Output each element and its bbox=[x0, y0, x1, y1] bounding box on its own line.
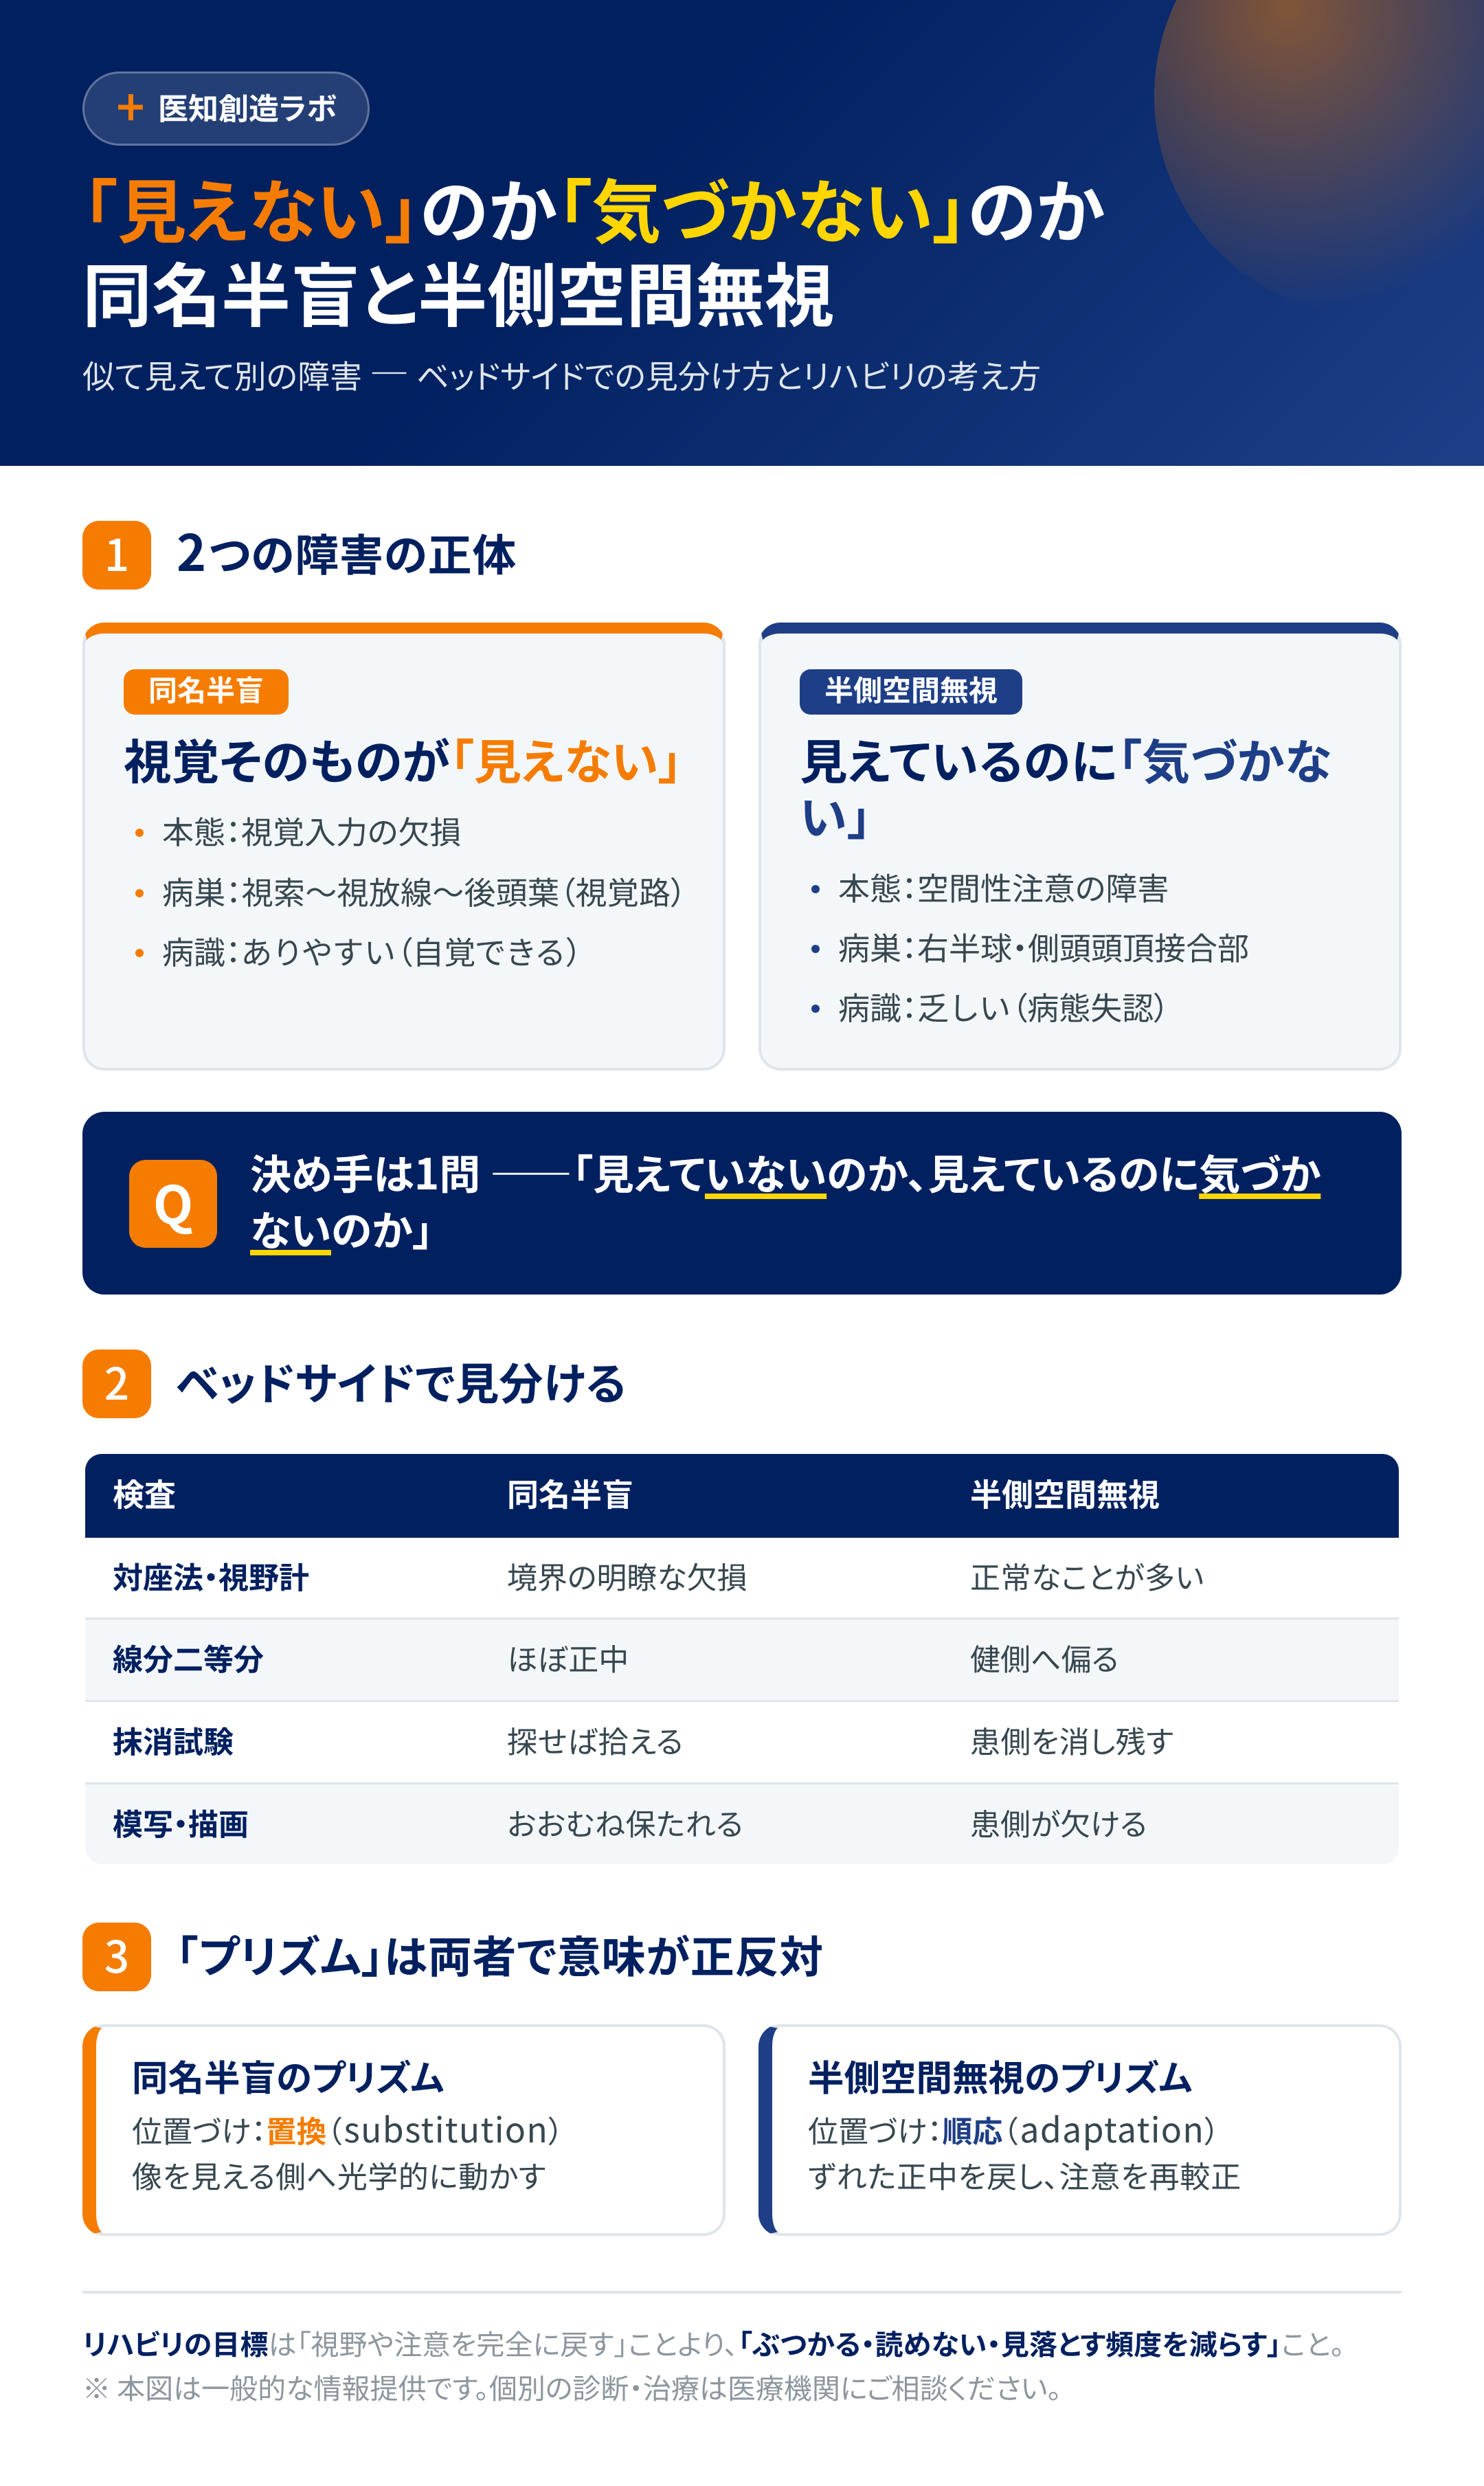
table header: 同名半盲 bbox=[507, 1470, 633, 1516]
row: cancellation: 探せば拾える bbox=[507, 1718, 684, 1762]
row: confrontation: 境界の明瞭な欠損 bbox=[507, 1554, 747, 1598]
heading text 2: ベッドサイドで見分ける bbox=[176, 1350, 626, 1413]
card heading bbox=[800, 724, 1332, 849]
bullet list: 本態：空間性注意の障害 bbox=[838, 864, 1169, 910]
card heading: 見えているのに「気づかな bbox=[800, 724, 1332, 794]
heading text 3: 「プリズム」は両者で意味が正反対 bbox=[176, 1923, 824, 1986]
decorative glow circle bbox=[1154, 0, 1484, 316]
heading text 1: 2つの障害の正体 bbox=[177, 513, 517, 586]
tag: 同名半盲 bbox=[148, 668, 264, 710]
prism heading: 同名半盲のプリズム bbox=[132, 2050, 444, 2102]
prism body: ずれた正中を戻し、注意を再較正 bbox=[808, 2153, 1241, 2197]
card heading: 視覚そのものが「見えない」 bbox=[124, 724, 682, 794]
brand pill bbox=[82, 71, 370, 146]
prism body: 位置づけ：順応（adaptation） bbox=[808, 2103, 1219, 2153]
prism body bbox=[132, 2103, 563, 2197]
bullet list: 病巣：右半球・側頭頭頂接合部 bbox=[838, 924, 1249, 970]
bullet list: 病識：乏しい（病態失認） bbox=[838, 984, 1169, 1029]
title: 同名半盲と半側空間無視 bbox=[82, 241, 834, 341]
row: copying bbox=[85, 1784, 1399, 1864]
section heading 3 bbox=[82, 1923, 824, 1991]
row: confrontation bbox=[85, 1538, 1399, 1620]
title: 「見えない」のか「気づかない」のか bbox=[82, 157, 1105, 258]
row: line bisection bbox=[85, 1620, 1399, 1702]
comparison table bbox=[85, 1454, 1399, 1864]
title bbox=[82, 157, 1105, 341]
icon: Q badge bbox=[129, 1160, 217, 1248]
number badge 1: 1 bbox=[104, 521, 129, 584]
tag: 半側空間無視 bbox=[824, 668, 998, 710]
row: copying: おおむね保たれる bbox=[507, 1800, 743, 1844]
question text: 決め手は1問 ——「見えていないのか、見えているのに気づか bbox=[250, 1140, 1320, 1202]
subtitle: 似て見えて別の障害 — ベッドサイドでの見分け方とリハビリの考え方 bbox=[82, 342, 1041, 400]
number badge 3: 3 bbox=[104, 1923, 129, 1986]
tag bbox=[124, 669, 289, 715]
question text: ないのか」 bbox=[250, 1198, 434, 1258]
panel: prism for hemianopia bbox=[82, 2024, 726, 2236]
table header: 検査 bbox=[113, 1470, 176, 1516]
prism heading: 半側空間無視のプリズム bbox=[808, 2050, 1192, 2102]
row: copying: 模写・描画 bbox=[113, 1800, 249, 1844]
bullet list: 病識：ありやすい（自覚できる） bbox=[162, 928, 582, 974]
row: line bisection: 線分二等分 bbox=[113, 1635, 264, 1679]
number badge 1 bbox=[82, 521, 151, 590]
section heading 2 bbox=[82, 1350, 626, 1418]
bullet list bbox=[135, 808, 687, 974]
bullet list: 本態：視覚入力の欠損 bbox=[162, 808, 461, 853]
row: line bisection: ほぼ正中 bbox=[507, 1635, 629, 1679]
row: copying: 患側が欠ける bbox=[970, 1800, 1147, 1844]
prism body: 位置づけ：置換（substitution） bbox=[132, 2103, 563, 2153]
panel: homonymous hemianopia bbox=[82, 623, 726, 1071]
row: confrontation: 正常なことが多い bbox=[970, 1554, 1204, 1598]
prism body: 像を見える側へ光学的に動かす bbox=[132, 2153, 546, 2197]
question text bbox=[250, 1140, 1320, 1258]
panel: hemispatial neglect bbox=[758, 623, 1402, 1071]
section heading 1 bbox=[82, 513, 517, 590]
row: line bisection: 健側へ偏る bbox=[970, 1635, 1118, 1679]
table header bbox=[85, 1454, 1399, 1538]
card heading: い」 bbox=[800, 780, 872, 849]
footer divider bbox=[82, 2291, 1402, 2294]
callout: key question bbox=[82, 1112, 1402, 1295]
bullet list bbox=[811, 864, 1249, 1029]
bullet list: 病巣：視索〜視放線〜後頭葉（視覚路） bbox=[162, 869, 687, 914]
table header: 半側空間無視 bbox=[970, 1470, 1160, 1516]
header banner bbox=[0, 0, 1484, 466]
panel: prism for neglect bbox=[758, 2024, 1402, 2236]
footer note bbox=[82, 2322, 1345, 2407]
footer note: リハビリの目標は「視野や注意を完全に戻す」ことより、「ぶつかる・読めない・見落とす頻度を減らす」こと。 bbox=[82, 2322, 1345, 2363]
footer note: ※ 本図は一般的な情報提供です。個別の診断・治療は医療機関にご相談ください。 bbox=[82, 2366, 1061, 2407]
icon: plus bbox=[118, 94, 143, 120]
number badge 3 bbox=[82, 1923, 151, 1991]
row: cancellation: 患側を消し残す bbox=[970, 1718, 1173, 1762]
tag bbox=[800, 669, 1022, 715]
icon: Q badge: Q bbox=[153, 1163, 193, 1239]
prism body bbox=[808, 2103, 1241, 2197]
brand name: 医知創造ラボ bbox=[158, 85, 337, 128]
row: cancellation: 抹消試験 bbox=[113, 1718, 234, 1762]
number badge 2 bbox=[82, 1350, 151, 1418]
number badge 2: 2 bbox=[104, 1350, 129, 1413]
row: confrontation: 対座法・視野計 bbox=[113, 1554, 309, 1598]
row: cancellation bbox=[85, 1702, 1399, 1784]
